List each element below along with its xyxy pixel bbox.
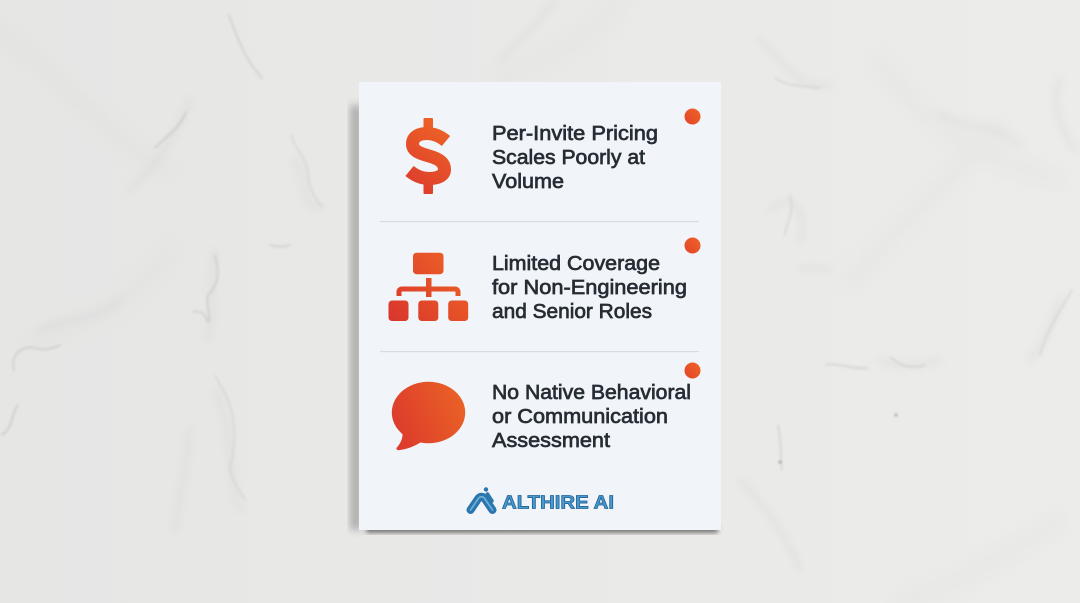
icon: org chart: [388, 253, 468, 321]
text: limited coverage: Limited Coverage: [492, 252, 660, 275]
item 2: limited coverage: [388, 238, 700, 323]
dot marker 3: [684, 362, 700, 378]
icon: speech bubble: [392, 382, 465, 450]
item 1: per-invite pricing: [410, 108, 700, 194]
item 3: behavioral assessment: [392, 362, 700, 452]
dot marker 2: [684, 238, 700, 254]
text: behavioral assessment: Assessment: [492, 429, 610, 452]
text: limited coverage: for Non-Engineering: [492, 276, 687, 299]
text: behavioral assessment: [492, 381, 691, 452]
text: behavioral assessment: No Native Behavioral: [492, 381, 691, 404]
text: per-invite pricing: Volume: [492, 170, 564, 193]
logo icon: [470, 487, 492, 510]
panel: card: [359, 82, 721, 530]
card shadow: [350, 105, 718, 533]
dot marker 1: [684, 108, 700, 124]
text: per-invite pricing: [492, 122, 658, 193]
icon: dollar sign: [410, 118, 446, 194]
text: limited coverage: and Senior Roles: [492, 300, 652, 323]
text: per-invite pricing: Scales Poorly at: [492, 146, 645, 169]
text: limited coverage: [492, 252, 687, 323]
logo wordmark: ALTHIRE AI: [502, 492, 614, 512]
logo: althire ai: [470, 487, 614, 512]
text: behavioral assessment: or Communication: [492, 405, 668, 428]
text: per-invite pricing: Per-Invite Pricing: [492, 122, 658, 145]
